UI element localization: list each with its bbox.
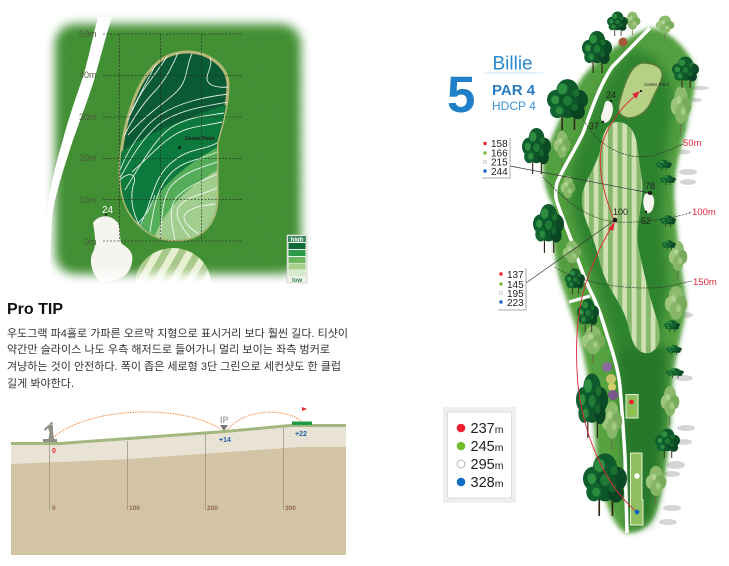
hazard distances: 37 [589,121,599,131]
label: bunker distance: 24 [102,205,114,216]
legend: tee distances: 295m [470,457,504,473]
elevation labels [52,431,307,455]
distance arcs [543,113,690,288]
grid labels: 30m [79,112,97,122]
tee markers [629,400,640,514]
pointer lines [510,166,650,283]
trees pale [554,12,691,505]
distance labels: 200 [207,505,218,512]
distance labels: 50m [683,138,702,149]
distance labels: 150m [693,277,717,288]
text block: tip: 우도그랙 파4홀로 가파른 오르막 지형으로 표시거리 보다 훨씬 길다. 티샷이 [7,327,348,340]
shot arcs [53,412,301,438]
striped fairway [582,122,660,353]
deep soil [11,425,346,555]
elevation labels: 0 [52,448,56,455]
back tee [630,453,643,525]
label leaders [681,144,692,282]
grid labels [79,29,97,247]
legend: tee distances: 328m [470,475,504,491]
trees left [522,12,628,516]
label: center point: Center Point [185,136,215,142]
arrowheads [609,92,639,230]
callout: yardage lower: 145 [507,280,524,291]
distance labels [683,138,717,288]
elevation labels: +14 [219,437,231,444]
slope band: light [141,148,217,240]
bunker: greenside [601,101,613,123]
hazard distances [589,90,655,226]
grid labels: 50m [79,29,97,39]
bunker [91,216,132,282]
text block: tip: 길게 봐야한다. [7,377,74,390]
putting green [618,63,662,118]
tree shadows [659,86,709,525]
grid labels: 10m [79,195,97,205]
handicap: HDCP 4 [492,99,536,113]
grass background [40,10,316,290]
putting green [118,50,230,242]
label: center point [178,136,215,149]
elevation labels: +22 [295,431,307,438]
rough terrain [543,28,695,533]
hazard distances: 100 [613,207,628,217]
panel: green detail map [46,16,310,284]
contour lines [120,53,228,240]
hole map [510,12,717,533]
trees right [655,57,699,458]
distance labels: 300 [285,505,296,512]
shot line to first target [576,226,637,512]
shot line to green [600,95,636,220]
distance labels [52,505,296,512]
callout: yardage lower: 223 [507,298,524,309]
text block: tip: 겨냥하는 것이 안전하다. 폭이 좁은 세로형 3단 그린으로 세컨샷도 한 클럽 [7,359,341,373]
hole name: Billie [492,54,533,74]
light soil [11,425,346,464]
distance labels: 100 [129,505,140,512]
distance markers [50,428,284,510]
icon: golfer [43,422,57,442]
grid labels: 20m [79,153,97,163]
cart path [44,17,112,280]
callout: yardage lower: 195 [507,289,524,300]
chart: elevation profile [11,407,346,555]
dark tee corridor [618,345,668,528]
bunker: fairway [643,194,654,213]
heading: Pro TIP: Pro TIP [7,301,63,318]
target dots [602,90,652,222]
callout: yardage upper: 166 [491,148,508,160]
legend: slope: high [291,238,304,244]
legend: tee distances: 237m [470,421,504,437]
hazard distances: 78 [645,181,655,191]
dark first cut around green and fairway [571,50,672,372]
hazard distances: 52 [641,216,651,226]
callout: yardage upper [481,138,510,178]
terrain texture [543,28,695,533]
hole title block [447,54,543,123]
legend: tee distances [443,407,516,503]
hole number: 5 [447,66,475,123]
slope band: lighter [155,170,217,240]
icon: green and flag [292,407,312,425]
callout: yardage upper: 158 [491,139,508,150]
ground line [11,426,346,444]
small brown shrub [618,38,628,46]
text block: tip: 약간만 슬라이스 나도 우측 해저드로 들어가니 멀리 보이는 좌측 벙커로 [7,342,330,356]
icon: IP marker [220,415,229,431]
grass texture [56,28,297,270]
cart path spur [569,296,590,302]
distance labels: 100m [692,207,716,218]
icon: IP marker: IP [220,415,229,425]
callout: yardage upper: 244 [491,167,508,178]
cart path [556,28,650,533]
par: PAR 4 [492,82,536,99]
slope band: medium [120,105,226,240]
grid labels: 40m [79,70,97,80]
legend: slope [287,235,307,284]
callout: yardage lower: 137 [507,270,524,281]
center point label: Center Point [644,82,670,87]
callout: yardage lower [498,268,526,310]
callout: yardage upper: 215 [491,158,508,168]
forward tee [626,394,638,418]
distance labels: 0 [52,505,56,512]
grid labels: 0m [84,237,97,247]
text block: tip [7,327,348,390]
hazard distances: 24 [606,90,616,100]
yardage grid [103,34,242,241]
flowering shrubs [602,362,618,400]
legend: slope: low [292,278,302,284]
striped fairway edge [136,248,210,282]
legend: tee distances: 245m [470,439,504,455]
